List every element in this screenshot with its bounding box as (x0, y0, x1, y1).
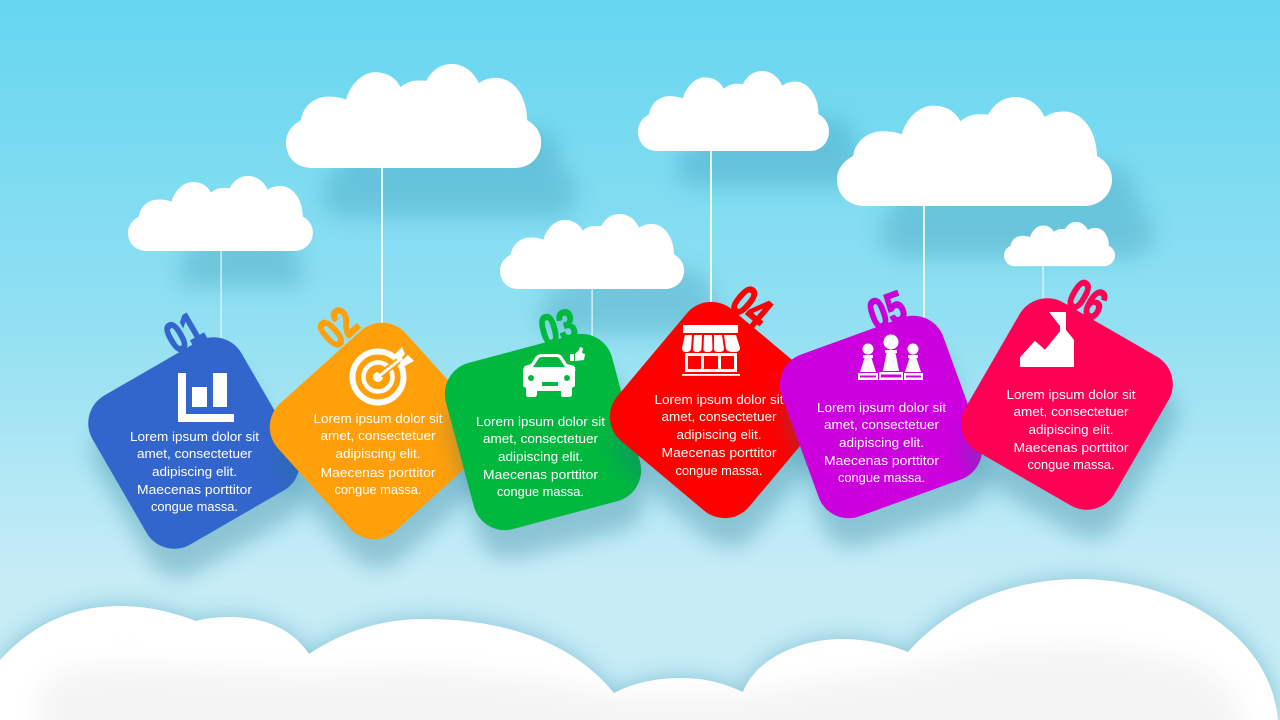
ground cloud inner shade (50, 654, 1230, 720)
card 03 text: congue massa. (497, 484, 584, 499)
card 03 text (476, 414, 605, 499)
card 04 text: amet, consectetuer (662, 409, 777, 424)
card 05 text: congue massa. (838, 470, 925, 485)
card 02 text (314, 411, 443, 497)
card 04 text: adipiscing elit. (676, 427, 762, 442)
card 03 text: Maecenas porttitor (483, 467, 599, 482)
card 01 text: adipiscing elit. (152, 464, 237, 479)
cloud 1 (128, 176, 313, 251)
card 01 text (130, 429, 259, 514)
card 06 text: Lorem ipsum dolor sit (1006, 387, 1136, 402)
card 04 panel (597, 289, 839, 531)
ground cloud (0, 579, 1278, 720)
card 05 text: Lorem ipsum dolor sit (817, 400, 946, 415)
card 01 text: Maecenas porttitor (137, 482, 253, 497)
card 06 panel (950, 287, 1184, 521)
card 04 shadow (601, 318, 843, 560)
cloud shadows (178, 107, 1154, 334)
card 06 (950, 270, 1188, 550)
card 05 panel (771, 307, 991, 527)
card 03 text: adipiscing elit. (498, 449, 583, 464)
card 04 text: Maecenas porttitor (662, 445, 777, 460)
card 06 text (1006, 387, 1136, 472)
card 02 (257, 298, 503, 581)
card 03 (438, 300, 652, 566)
card 04 text (654, 392, 784, 478)
number 04: 04 (721, 277, 781, 338)
card 05 text: amet, consectetuer (824, 417, 940, 432)
ground cloud body (0, 579, 1278, 720)
card 03 shadow (442, 356, 652, 566)
card 05 (771, 282, 995, 556)
card 02 text: Maecenas porttitor (320, 465, 436, 480)
card 01 text: Lorem ipsum dolor sit (130, 429, 259, 444)
card 03 panel (438, 327, 648, 537)
card 02 text: adipiscing elit. (336, 446, 420, 461)
number 03: 03 (534, 300, 582, 357)
card 05 text (817, 400, 946, 485)
ground cloud shadow (0, 579, 1278, 720)
card 02 text: congue massa. (334, 482, 422, 497)
cloud 4 (638, 71, 829, 151)
number 01: 01 (156, 303, 212, 364)
card 01 text: congue massa. (151, 499, 238, 514)
number 06: 06 (1059, 270, 1115, 331)
cloud 3 (500, 214, 684, 289)
card 06 text: amet, consectetuer (1014, 404, 1129, 419)
card 06 text: adipiscing elit. (1028, 422, 1114, 437)
card 01 shadow (81, 355, 315, 589)
card 04 text: Lorem ipsum dolor sit (654, 392, 784, 407)
number 05: 05 (861, 282, 913, 341)
card 02 text: amet, consectetuer (320, 428, 436, 443)
card 05 text: adipiscing elit. (839, 435, 924, 450)
icon: mountain peak (1020, 312, 1074, 366)
icon: target with arrow (352, 347, 414, 402)
card 05 shadow (775, 336, 995, 556)
hanging strings (220, 150, 1044, 340)
icon: car with thumbs up (523, 347, 585, 397)
card 03 text: Lorem ipsum dolor sit (476, 414, 605, 429)
card 06 shadow (954, 316, 1188, 550)
card 06 text: congue massa. (1028, 457, 1114, 472)
card 05 text: Maecenas porttitor (824, 453, 940, 468)
card 02 panel (257, 310, 499, 552)
card 04 (597, 277, 843, 560)
card 02 shadow (261, 339, 503, 581)
icon: bar chart (178, 373, 234, 422)
card 04 text: congue massa. (676, 463, 762, 478)
card 02 text: Lorem ipsum dolor sit (314, 411, 443, 426)
card 03 text: amet, consectetuer (483, 431, 599, 446)
card 01 (77, 303, 315, 589)
cloud 2 (286, 64, 541, 168)
number 02: 02 (308, 298, 368, 359)
card 06 text: Maecenas porttitor (1014, 440, 1129, 455)
card 01 panel (77, 326, 311, 560)
icon: shop (682, 325, 740, 376)
cloud 6 (1004, 222, 1115, 266)
icon: chess pawns (858, 334, 923, 380)
card 01 text: amet, consectetuer (137, 446, 253, 461)
cloud 5 (837, 97, 1112, 206)
